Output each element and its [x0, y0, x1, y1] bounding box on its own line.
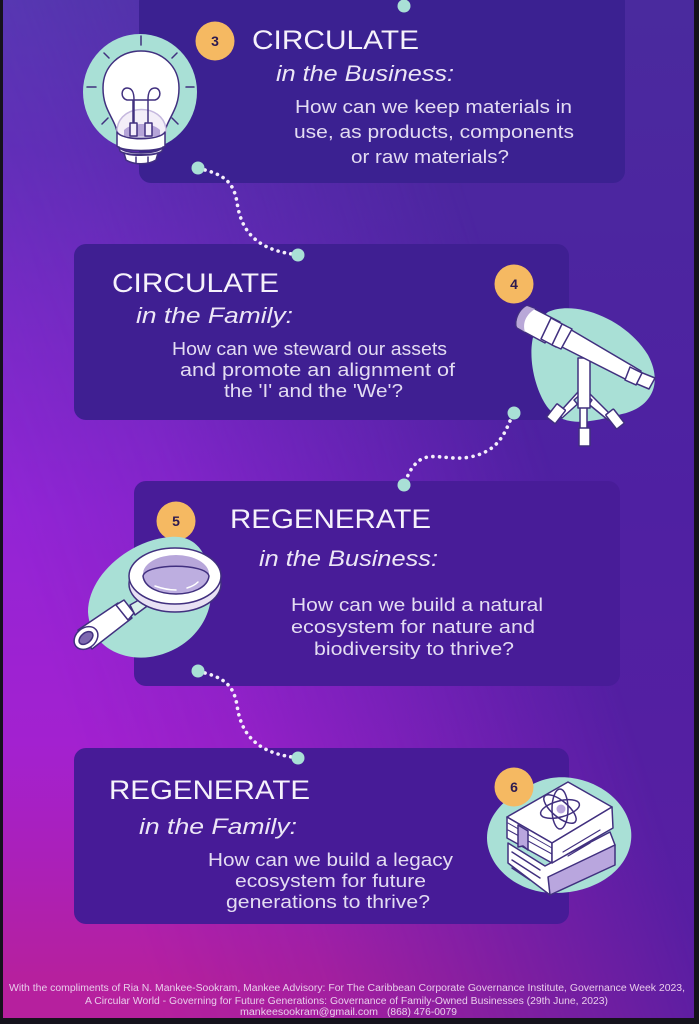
body text: biodiversity to thrive? [314, 639, 514, 659]
badge: 6: 6 [510, 779, 518, 795]
footer credits: A Circular World - Governing for Future Generations: Governance of Family-Owned Businesses (29th June, 2023) [85, 996, 608, 1007]
top connector dot [398, 0, 410, 12]
panel: regenerate in the family [74, 748, 569, 924]
icon: books [487, 768, 631, 895]
footer credits: (868) 476-0079 [387, 1007, 457, 1018]
dotted connector: step 3 to 4 [192, 162, 304, 262]
icon: magnifying glass [70, 502, 221, 658]
subheading: in the business: in the Business: [276, 61, 454, 86]
dotted connector: step 4 to 5 [398, 406, 520, 492]
panel: circulate in the business [139, 0, 625, 183]
icon: telescope [516, 306, 655, 446]
panel: regenerate in the business [134, 481, 620, 686]
body text: ecosystem for future [235, 871, 426, 891]
body text: How can we steward our assets [172, 339, 447, 359]
heading: regenerate: REGENERATE [109, 775, 310, 805]
body text: How can we keep materials in [295, 97, 572, 117]
badge: 3 [196, 22, 234, 60]
body text: How can we build a natural [291, 595, 543, 615]
icon: light bulb [83, 34, 197, 164]
badge: 5: 5 [172, 513, 180, 529]
badge: 4: 4 [510, 276, 518, 292]
badge: 4 [494, 264, 534, 304]
heading: circulate: CIRCULATE [112, 268, 279, 298]
dotted connector: step 5 to 6 [192, 664, 304, 764]
body text: generations to thrive? [226, 892, 430, 912]
heading: regenerate: REGENERATE [230, 504, 431, 534]
footer credits [9, 983, 685, 1018]
badge: 6 [494, 768, 534, 806]
footer credits: mankeesookram@gmail.com [240, 1007, 378, 1018]
heading: circulate: CIRCULATE [252, 25, 419, 55]
body text: the 'I' and the 'We'? [224, 381, 403, 401]
body text: use, as products, components [294, 122, 574, 142]
subheading: in the family: in the Family: [136, 303, 293, 328]
body text: and promote an alignment of [180, 360, 456, 380]
body text: or raw materials? [351, 147, 509, 167]
footer credits: With the compliments of Ria N. Mankee-Sookram, Mankee Advisory: For The Caribbean Corporate Governance Institute, Governance Week 2023, [9, 983, 685, 994]
subheading: in the business: in the Business: [259, 546, 438, 571]
body text: How can we build a legacy [208, 850, 453, 870]
subheading: in the family: in the Family: [139, 814, 297, 839]
badge: 5 [156, 502, 196, 540]
body text: ecosystem for nature and [291, 617, 535, 637]
panel: circulate in the family [74, 244, 569, 420]
badge: 3: 3 [211, 33, 219, 49]
